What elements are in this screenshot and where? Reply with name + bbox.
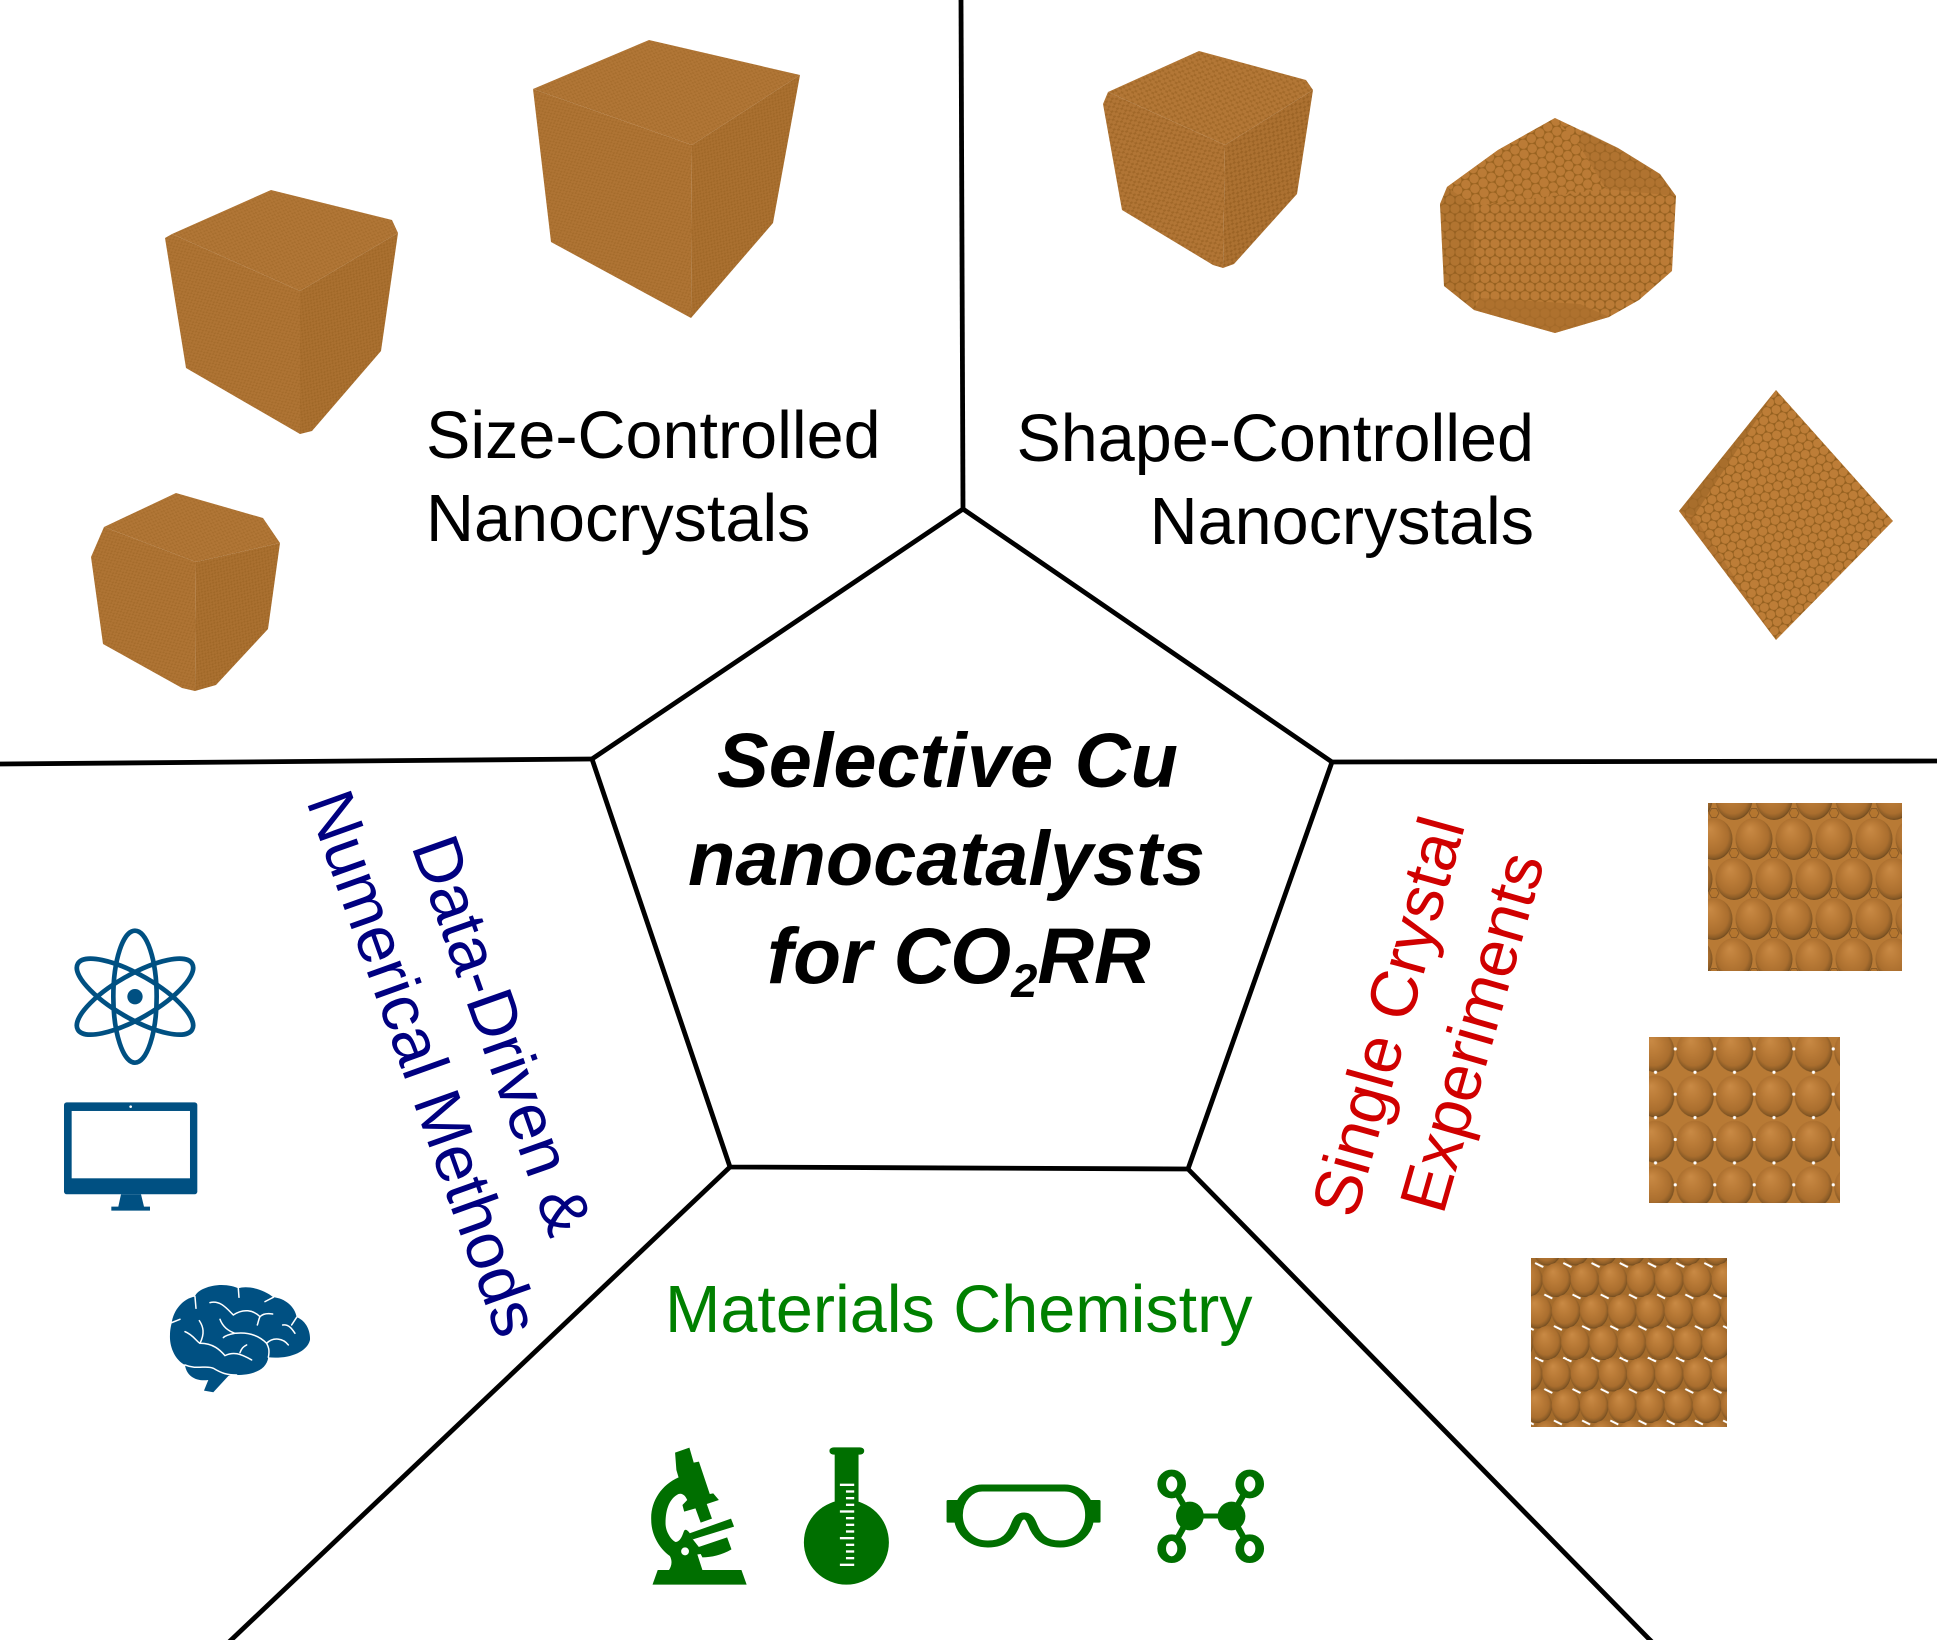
label: single crystal experiments: Single Crystal	[1298, 809, 1480, 1224]
icon: molecule	[1162, 1473, 1260, 1560]
central title: 2	[1010, 954, 1037, 1007]
central title: for CO	[767, 912, 1011, 1000]
icon: flask	[804, 1447, 889, 1585]
panel: size-controlled nanocrystals	[91, 40, 881, 691]
nanocrystal: rounded cube	[1103, 51, 1313, 268]
nanocrystal: octahedron	[1679, 390, 1893, 640]
icon: safety goggles	[947, 1488, 1101, 1544]
central title	[688, 718, 1205, 1007]
nanocrystal: truncated polyhedron	[1440, 118, 1676, 333]
label: shape-controlled nanocrystals: Shape-Controlled	[1016, 402, 1534, 476]
label: size-controlled nanocrystals: Nanocrystals	[426, 482, 810, 556]
label: size-controlled nanocrystals: Size-Controlled	[426, 399, 881, 473]
label: single crystal experiments: Experiments	[1386, 844, 1559, 1220]
label: materials chemistry: Materials Chemistry	[665, 1273, 1253, 1347]
icon: brain	[170, 1285, 310, 1392]
label: single crystal experiments	[1298, 809, 1559, 1224]
crystal surface: middle	[1649, 1037, 1840, 1203]
icon: computer monitor	[64, 1102, 197, 1211]
label: data-driven and numerical methods: Data-Driven &	[397, 826, 606, 1245]
icon: atom	[67, 931, 203, 1063]
panel: single crystal experiments	[1298, 803, 1902, 1427]
nanocrystal: small cube	[91, 493, 280, 691]
label: data-driven and numerical methods: Numerical Methods	[292, 781, 554, 1346]
icon: microscope	[651, 1448, 747, 1585]
panel: shape-controlled nanocrystals	[1016, 51, 1893, 640]
panel: materials chemistry	[651, 1273, 1260, 1585]
panel: data-driven and numerical methods	[64, 781, 606, 1392]
central title: RR	[1037, 912, 1151, 1000]
central title: Selective Cu	[717, 718, 1178, 804]
nanocrystal: large cube	[533, 40, 800, 318]
label: shape-controlled nanocrystals: Nanocrystals	[1150, 485, 1534, 559]
green icon row	[651, 1447, 1260, 1585]
blue icon column	[64, 931, 310, 1392]
crystal surface: bottom	[1531, 1258, 1727, 1427]
central title: nanocatalysts	[688, 816, 1205, 902]
nanocrystal: medium cube	[165, 190, 398, 434]
crystal surface: top	[1708, 803, 1902, 971]
